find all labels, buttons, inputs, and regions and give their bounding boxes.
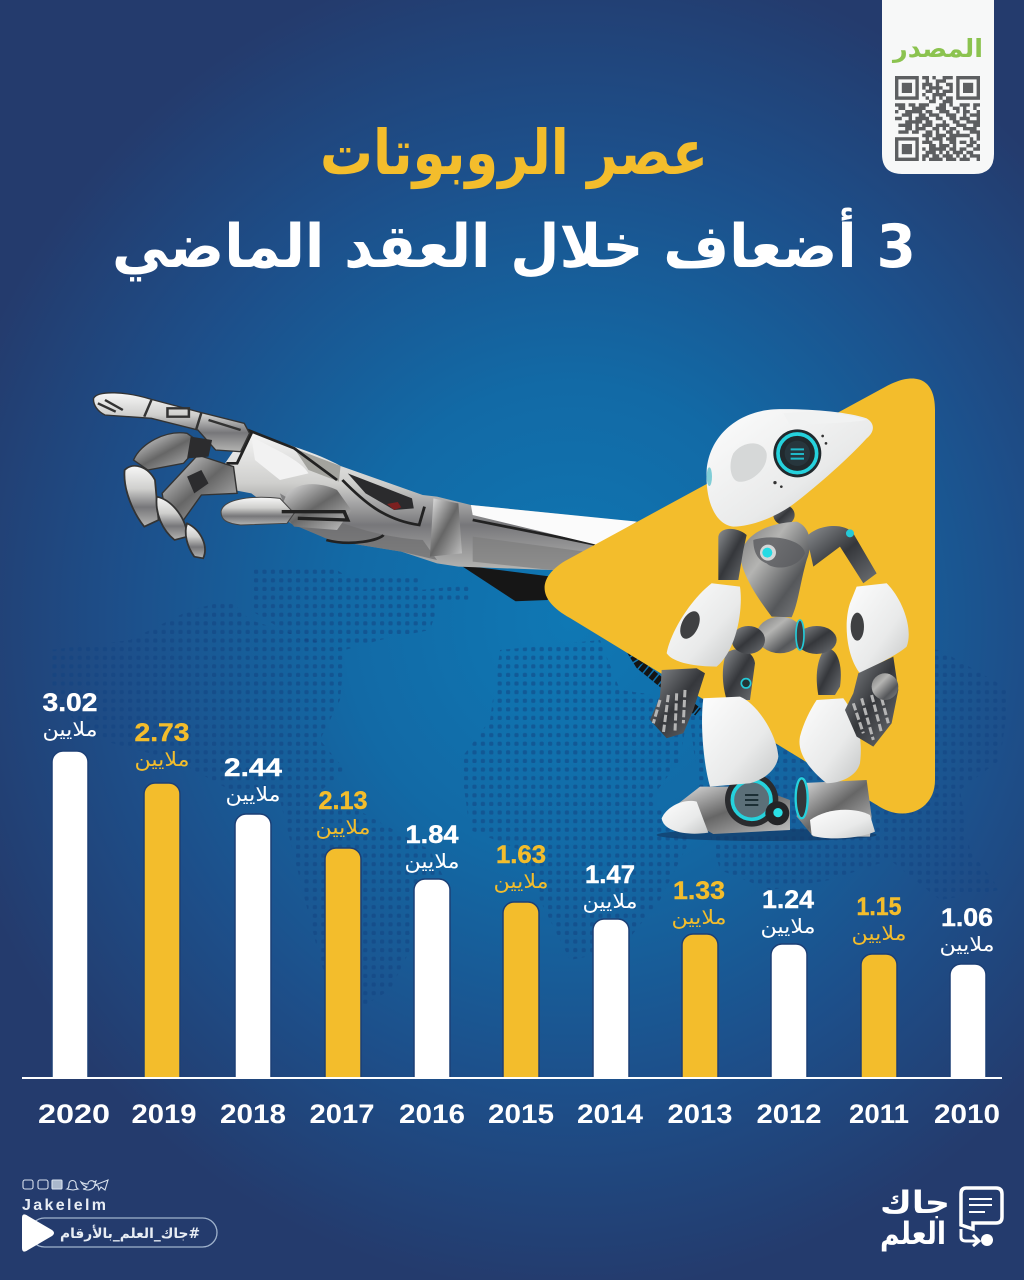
- hashtag text: #جاك_العلم_بالأرقام: [60, 1225, 200, 1242]
- robot head: [707, 409, 873, 527]
- year labels: 2011: [849, 1099, 909, 1129]
- million labels: ملايين: [226, 782, 280, 806]
- social icons: [23, 1180, 108, 1190]
- million labels: ملايين: [404, 849, 460, 873]
- million labels: ملايين: [316, 815, 370, 839]
- robot neck and torso: [740, 505, 810, 617]
- million labels: ملايين: [852, 921, 906, 945]
- value labels: 2.73: [134, 719, 190, 747]
- year labels: 2014: [577, 1099, 643, 1129]
- robotic arm: [93, 393, 651, 601]
- value labels: 1.84: [406, 821, 459, 849]
- value labels: 1.24: [762, 886, 814, 914]
- year labels: 2012: [756, 1099, 822, 1129]
- bars: [52, 751, 986, 1091]
- QR code: [895, 78, 980, 159]
- year labels: 2019: [132, 1099, 196, 1129]
- robot legs: [702, 648, 861, 787]
- value labels: 3.02: [42, 689, 98, 717]
- dotted world map: [50, 566, 1010, 1020]
- year labels: 2017: [310, 1099, 374, 1129]
- year labels: 2010: [934, 1099, 1000, 1129]
- source QR card: [882, 0, 994, 174]
- million labels: [42, 717, 994, 956]
- year labels: 2020: [38, 1099, 110, 1129]
- source label: المصدر: [891, 34, 983, 63]
- logo chat icon: [961, 1188, 1002, 1246]
- year labels: 2018: [220, 1099, 286, 1129]
- axis line: [22, 1077, 1002, 1079]
- million labels: ملايين: [940, 932, 994, 956]
- robot pelvis: [732, 617, 837, 654]
- value labels: 1.47: [585, 861, 635, 889]
- million labels: ملايين: [760, 914, 816, 938]
- value labels: 1.06: [941, 904, 993, 932]
- logo wordmark: [880, 1185, 950, 1252]
- value labels: 1.15: [856, 893, 902, 921]
- year labels: 2016: [399, 1099, 465, 1129]
- year labels: 2015: [488, 1099, 554, 1129]
- hashtag pill: [22, 1214, 217, 1252]
- year labels: 2013: [668, 1099, 732, 1129]
- bar chart: [22, 689, 1002, 1129]
- logo: [880, 1185, 1002, 1252]
- robot left arm: [650, 529, 747, 738]
- play triangle: [22, 1214, 54, 1252]
- year labels: [38, 1099, 1000, 1129]
- robot feet and lower legs: [657, 773, 877, 841]
- yellow triangle: [545, 379, 935, 813]
- robot cable: [600, 600, 698, 712]
- value labels: 2.13: [318, 787, 368, 815]
- value labels: 1.63: [496, 841, 546, 869]
- value labels: [42, 689, 993, 932]
- middle fingers: [134, 433, 201, 470]
- value labels: 1.33: [673, 877, 725, 905]
- Jakelelm handle: Jakelelm: [22, 1197, 106, 1214]
- million labels: ملايين: [582, 889, 638, 913]
- million labels: ملايين: [494, 869, 548, 893]
- value labels: 2.44: [224, 754, 282, 782]
- robot right arm: [807, 526, 909, 747]
- robot: [650, 409, 909, 841]
- thumb: [221, 497, 294, 525]
- million labels: ملايين: [42, 717, 98, 741]
- million labels: ملايين: [134, 747, 190, 771]
- logo wordmark: العلم: [880, 1216, 946, 1252]
- million labels: ملايين: [672, 905, 726, 929]
- title: عصر الروبوتات: [320, 116, 708, 189]
- index finger: [93, 393, 250, 452]
- subtitle: 3 أضعاف خلال العقد الماضي: [112, 207, 916, 282]
- logo wordmark: جاك: [880, 1185, 950, 1221]
